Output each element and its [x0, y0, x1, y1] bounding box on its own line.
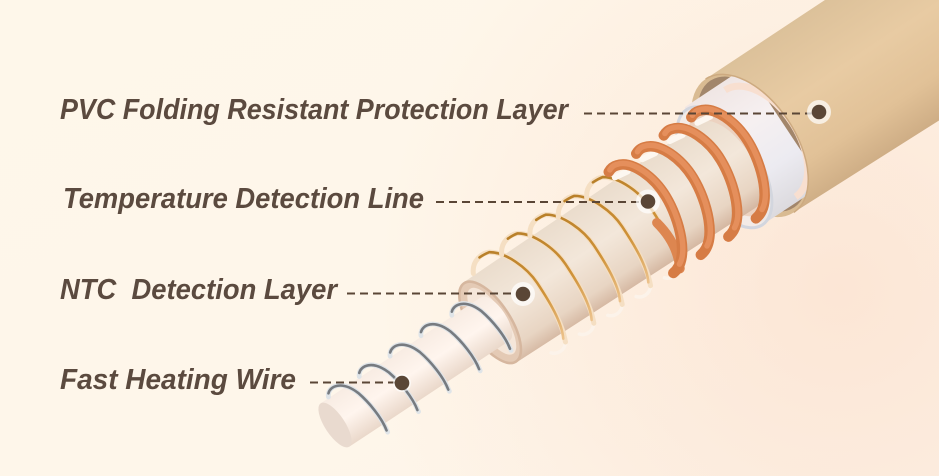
callout: fast heating wire	[60, 364, 411, 396]
insulated orange coils	[606, 96, 787, 273]
callout: PVC protection layer	[60, 94, 831, 126]
temperature detection gold coils	[467, 163, 689, 368]
label: temperature line: Temperature Detection Line	[63, 183, 424, 215]
white core	[312, 291, 519, 452]
heating cable illustration	[280, 0, 939, 476]
label: heating wire: Fast Heating Wire	[60, 364, 296, 396]
inner foil layer	[656, 62, 830, 244]
fast heating wire coils	[325, 293, 512, 449]
label: NTC layer: NTC Detection Layer	[60, 274, 339, 306]
NTC detection layer	[445, 109, 776, 376]
PVC outer tube	[706, 0, 939, 217]
label: PVC layer: PVC Folding Resistant Protection Layer	[60, 94, 570, 126]
tube opening interior	[675, 57, 829, 231]
tube back rim	[667, 54, 832, 238]
callout: temperature detection line	[63, 183, 660, 215]
callout: NTC detection layer	[60, 274, 535, 306]
